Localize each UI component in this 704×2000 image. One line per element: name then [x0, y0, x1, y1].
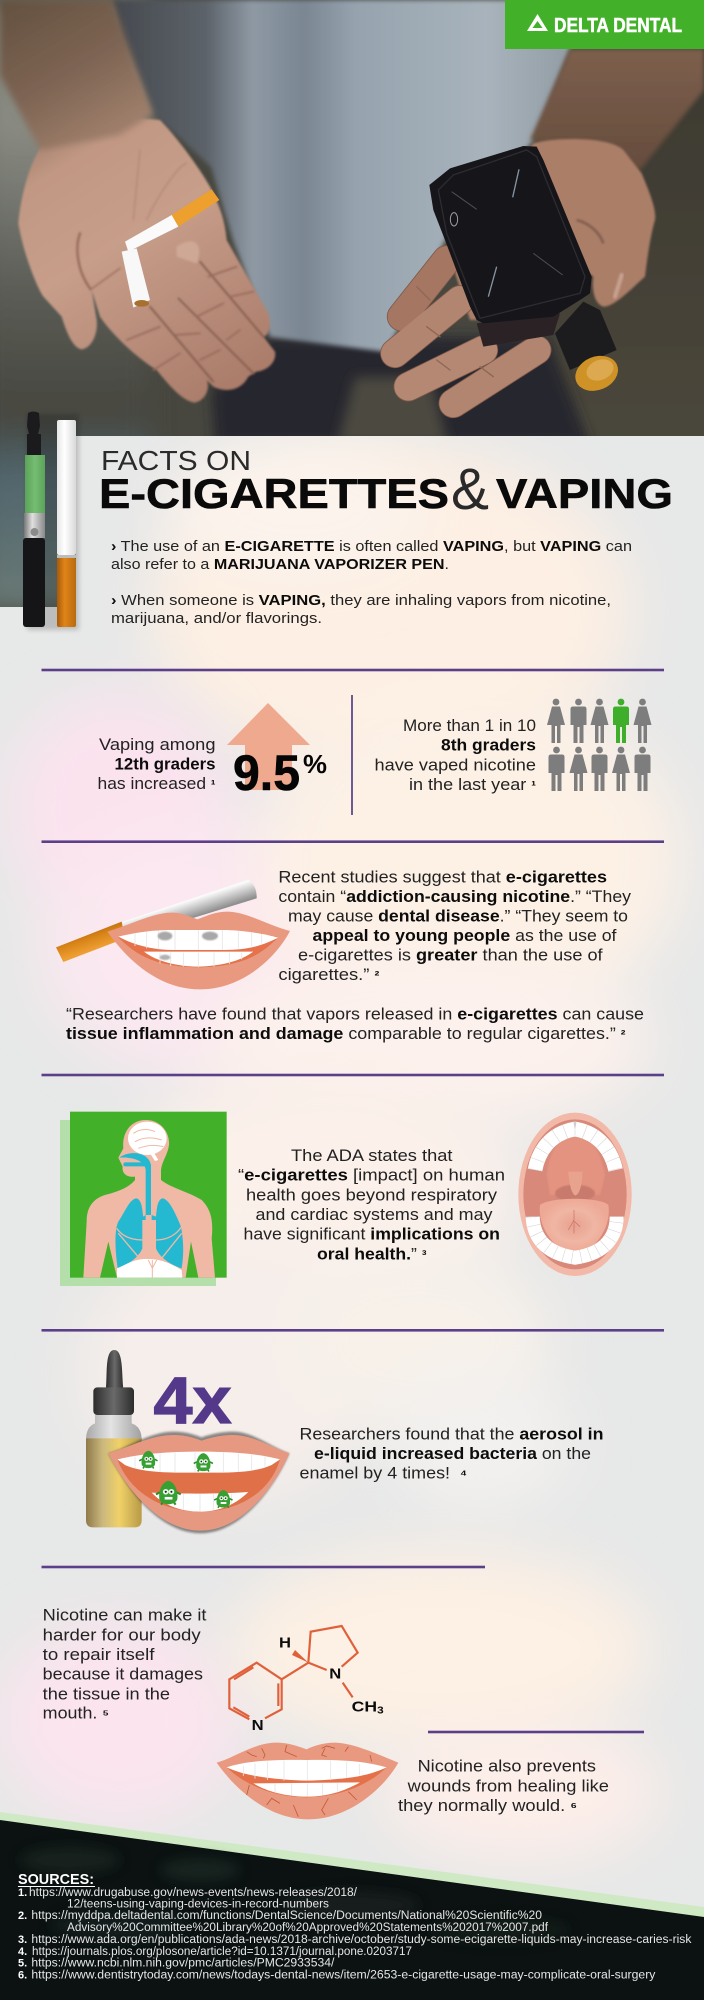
text block: wounds: Nicotine also prevents [418, 1758, 596, 1776]
intro text: › When someone is VAPING, they are inhaling vapors from nicotine, [111, 592, 611, 609]
stat: 12th graders 9.5%: has increased ¹ [98, 775, 216, 793]
text block: recent studies: Recent studies suggest that e-cigarettes [278, 868, 607, 886]
chart: nicotine molecule: H [279, 1635, 291, 1652]
text block: nicotine tissue: the tissue in the [43, 1685, 170, 1703]
chart: nicotine molecule: CH [352, 1699, 373, 1716]
source list: 3. [18, 1934, 27, 1946]
text block: ADA statement: and cardiac systems and may [256, 1206, 493, 1224]
intro text: also refer to a MARIJUANA VAPORIZER PEN . [111, 556, 449, 573]
stat: 8th graders: 8th graders [441, 737, 536, 755]
source list: https://myddpa.deltadental.com/functions/DentalScience/Documents/National%20Scientific%20 [31, 1910, 542, 1922]
text block: researchers quote [66, 1005, 644, 1043]
left hand with broken cigarette [18, 110, 275, 403]
chart: nicotine molecule: N [329, 1665, 341, 1682]
header photo: hands holding cigarette and vape [0, 0, 704, 610]
text block: recent studies: contain “ addiction-causing nicotine .” “They [278, 888, 632, 906]
text block: recent studies: e-cigarettes is greater than the use of [298, 946, 603, 964]
source list: 5. [18, 1958, 27, 1970]
logo panel: Delta Dental: DELTA DENTAL [554, 15, 682, 37]
stat: 8th graders [374, 699, 652, 794]
text block: nicotine tissue: to repair itself [43, 1646, 155, 1664]
text block: recent studies: may cause dental disease .” “They seem to [288, 908, 628, 926]
text block: wounds [398, 1758, 609, 1815]
text block: ADA statement: oral health. ” ³ [317, 1245, 427, 1263]
illustration: cigarette and stained mouth [56, 879, 290, 989]
chart: nicotine molecule [229, 1626, 384, 1734]
text block: nicotine tissue: mouth. ⁵ [43, 1704, 109, 1722]
stat: 8th graders: in the last year ¹ [409, 776, 536, 794]
illustration: mouth with bacteria [108, 1432, 289, 1533]
illustration: respiratory system panel [60, 1112, 227, 1286]
source list [18, 1887, 692, 1982]
text block: researchers quote: “Researchers have found that vapors released in e-cigarettes can cause [66, 1005, 644, 1023]
stat: 8th graders: have vaped nicotine [374, 756, 536, 774]
stat: 12th graders 9.5%: Vaping among [99, 736, 216, 754]
text block: wounds: wounds from healing like [407, 1777, 609, 1795]
source list: 4. [18, 1946, 27, 1958]
icon: e-cigarette and cigarette [23, 412, 79, 630]
title: VAPING [496, 470, 673, 517]
stat: 12th graders 9.5%: % [303, 749, 327, 779]
source list: 1. [18, 1887, 27, 1899]
heading: 4x: 4x [154, 1363, 232, 1437]
illustration: mouth with cracked lips [217, 1743, 398, 1819]
illustration: e-liquid bottle [86, 1350, 142, 1527]
text block: aerosol: Researchers found that the aerosol in [300, 1425, 604, 1443]
text block: wounds: they normally would. ⁶ [398, 1797, 577, 1815]
text block: aerosol: e-liquid increased bacteria on the [314, 1445, 591, 1463]
source list: 2. [18, 1910, 27, 1922]
title: E-CIGARETTES [99, 470, 449, 517]
text block: aerosol: enamel by 4 times! ⁴ [300, 1465, 467, 1483]
text block: ADA statement: have significant implications on [244, 1226, 500, 1244]
illustration: open mouth [518, 1113, 632, 1276]
text block: recent studies: appeal to young people as the use of [312, 927, 617, 945]
title [99, 445, 673, 522]
text block: aerosol [300, 1425, 604, 1483]
source list: 6. [18, 1970, 27, 1982]
stat: 12th graders 9.5% [98, 703, 327, 801]
logo panel: Delta Dental [505, 0, 704, 49]
source list: https://journals.plos.org/plosone/article?id=10.1371/journal.pone.0203717 [32, 1946, 412, 1958]
stat: 8th graders: More than 1 in 10 [403, 717, 536, 735]
text block: nicotine tissue: Nicotine can make it [43, 1607, 207, 1625]
text block: ADA statement [238, 1147, 505, 1263]
source list: 12/teens-using-vaping-devices-in-record-numbers [67, 1898, 329, 1910]
source list: https://www.ncbi.nlm.nih.gov/pmc/articles/PMC2933534/ [31, 1958, 335, 1970]
source list: https://www.ada.org/en/publications/ada-news/2018-archive/october/study-some-ecigarette-liquids-may-increase-caries-risk [31, 1934, 692, 1946]
heading: sources: SOURCES: [18, 1871, 94, 1888]
icon: ten people, one green [547, 699, 652, 791]
text block: ADA statement: health goes beyond respiratory [246, 1186, 498, 1204]
text block: nicotine tissue: harder for our body [43, 1626, 202, 1644]
source list: https://www.drugabuse.gov/news-events/news-releases/2018/ [29, 1887, 358, 1899]
text block: recent studies: cigarettes.” ² [278, 966, 380, 984]
footer panel: sources [0, 1812, 704, 2000]
stat: 12th graders 9.5%: 9.5 [233, 745, 300, 801]
left forearm [0, 0, 153, 150]
intro text: › The use of an E-CIGARETTE is often called VAPING , but VAPING can [111, 538, 632, 555]
title: & [451, 457, 489, 522]
intro text: marijuana, and/or flavorings. [111, 610, 322, 627]
icon: up arrow [227, 703, 310, 790]
text block: nicotine tissue [43, 1607, 207, 1722]
text block: recent studies [278, 868, 632, 984]
source list: https://www.dentistrytoday.com/news/todays-dental-news/item/2653-e-cigarette-usage-may-complicate-oral-surgery [31, 1970, 656, 1982]
text block: nicotine tissue: because it damages [43, 1666, 203, 1684]
icon: delta triangle [527, 14, 548, 31]
chart: nicotine molecule: 3 [377, 1706, 384, 1717]
text block: ADA statement: “e-cigarettes [impact] on human [238, 1167, 505, 1185]
chart: nicotine molecule: N [252, 1717, 264, 1734]
right hand with vape device [395, 139, 655, 403]
background smoke [0, 430, 704, 1930]
stat: 12th graders 9.5%: 12th graders [114, 755, 216, 773]
intro text [111, 538, 632, 627]
source list: Advisory%20Committee%20Library%20of%20Approved%20Statements%202017%2007.pdf [67, 1922, 549, 1934]
text block: ADA statement: The ADA states that [291, 1147, 453, 1165]
title: FACTS ON [101, 445, 251, 476]
text block: researchers quote: tissue inflammation and damage comparable to regular cigarettes.” ² [66, 1025, 626, 1043]
